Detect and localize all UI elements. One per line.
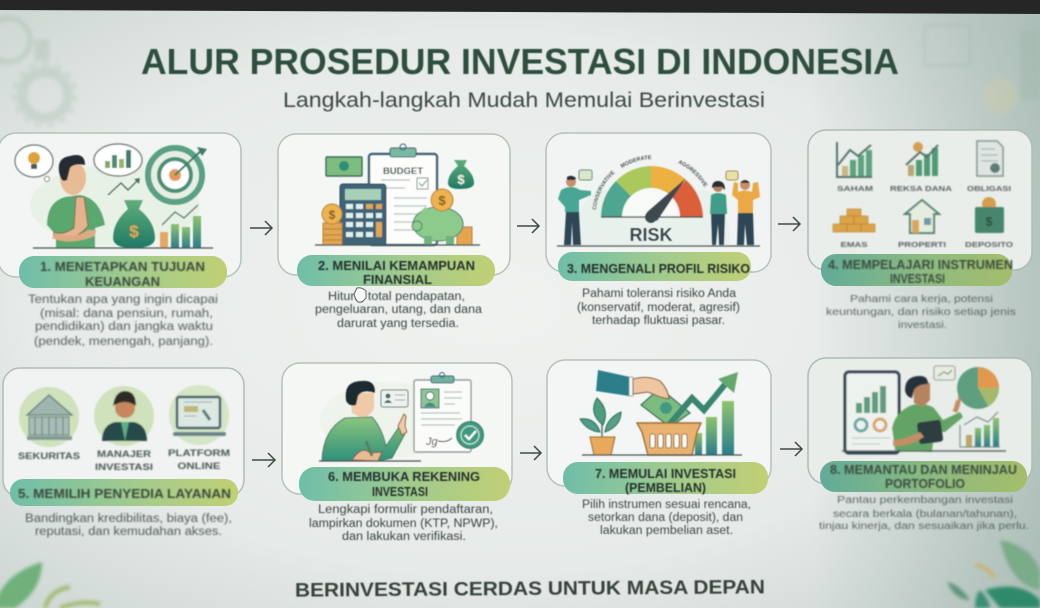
card frame	[0, 133, 241, 277]
illustration: risk gauge with people	[556, 154, 761, 248]
heading text: (PEMBELIAN)	[625, 480, 706, 495]
title: ALUR PROSEDUR INVESTASI DI INDONESIA	[141, 41, 899, 82]
panel: step 2	[278, 134, 510, 330]
description: Pahami cara kerja, potensi	[850, 293, 993, 305]
illustration: instrument icons: SAHAM	[837, 184, 873, 193]
pill heading	[563, 462, 768, 494]
illustration: service providers	[18, 385, 230, 472]
pill heading	[558, 252, 751, 281]
footer tagline: BERINVESTASI CERDAS UNTUK MASA DEPAN	[295, 576, 765, 602]
description: pengeluaran, utang, dan dana	[315, 304, 483, 316]
panel: step 6	[282, 363, 512, 543]
heading text	[830, 463, 1017, 491]
illustration: instrument icons: $	[985, 214, 993, 229]
arrow 6 to 7	[520, 446, 541, 460]
pill heading	[820, 461, 1027, 492]
pill heading	[821, 254, 1012, 286]
illustration: person thinking about goals: $	[129, 222, 139, 241]
description: lakukan pembelian aset.	[600, 525, 733, 537]
description: lampirkan dokumen (KTP, NPWP),	[309, 518, 498, 530]
illustration: investing money into basket	[580, 370, 742, 455]
illustration: service providers: SEKURITAS	[18, 451, 80, 461]
description: darurat yang tersedia.	[337, 318, 459, 330]
description	[309, 504, 498, 543]
description: investasi.	[898, 319, 947, 331]
card frame	[3, 368, 244, 497]
illustration: instrument icons: REKSA DANA	[890, 184, 953, 193]
pill heading	[299, 467, 510, 501]
description	[826, 293, 1016, 331]
card frame	[278, 134, 510, 275]
illustration: instrument icons	[833, 141, 1013, 249]
decoration: leaves bottom right	[947, 540, 1040, 608]
description: (pendek, menengah, panjang).	[34, 336, 213, 348]
illustration: person filling in registration form	[319, 372, 484, 461]
heading text: 2. MENILAI KEMAMPUAN	[318, 258, 475, 273]
illustration: budget, calculator, piggy bank: $	[329, 208, 336, 222]
faint background decoration: gears and charts	[0, 18, 1040, 126]
heading text: PORTOFOLIO	[885, 477, 965, 491]
illustration: service providers: ONLINE	[178, 461, 220, 471]
description: Bandingkan kredibilitas, biaya (fee),	[25, 513, 232, 525]
description	[582, 499, 751, 537]
illustration: risk gauge with people: CONSERVATIVE	[592, 170, 616, 210]
icon: hand cursor	[354, 288, 366, 302]
illustration: risk gauge with people: RISK	[629, 225, 673, 245]
card frame	[282, 363, 512, 494]
description: (konservatif, moderat, agresif)	[577, 302, 740, 314]
heading text	[828, 257, 1013, 286]
card frame	[547, 360, 771, 486]
description: terhadap fluktuasi pasar.	[592, 315, 725, 327]
description: secara berkala (bulanan/tahunan),	[833, 509, 1017, 520]
illustration: service providers: MANAJER	[97, 449, 152, 459]
illustration: budget, calculator, piggy bank: BUDGET	[383, 166, 423, 177]
description: setorkan dana (deposit), dan	[588, 512, 743, 524]
illustration: instrument icons: DEPOSITO	[965, 240, 1013, 249]
description: Pahami toleransi risiko Anda	[582, 288, 737, 300]
description: Pilih instrumen sesuai rencana,	[582, 499, 751, 511]
description: (misal: dana pensiun, rumah,	[40, 308, 213, 320]
top dark screen edge	[0, 0, 1040, 14]
panel: step 3	[545, 132, 772, 328]
description: Lengkapi formulir pendaftaran,	[318, 504, 493, 516]
illustration: budget, calculator, piggy bank: $	[438, 193, 446, 208]
subtitle: Langkah-langkah Mudah Memulai Berinvestasi	[283, 89, 765, 112]
arrow 3 to 4	[778, 217, 800, 231]
illustration: risk gauge with people: MODERATE	[620, 154, 652, 168]
illustration: instrument icons: OBLIGASI	[967, 184, 1011, 193]
illustration: service providers: PLATFORM	[168, 448, 230, 458]
panel: step 4	[808, 130, 1032, 331]
heading text: INVESTASI	[372, 484, 428, 499]
description: reputasi, dan kemudahan akses.	[35, 526, 222, 538]
description	[25, 513, 232, 538]
arrow 5 to 6	[252, 453, 275, 467]
description	[577, 288, 740, 327]
illustration: service providers: INVESTASI	[95, 462, 153, 472]
illustration: budget, calculator, piggy bank: $	[457, 172, 465, 187]
heading text: KEUANGAN	[85, 274, 160, 289]
heading text: 4. MEMPELAJARI INSTRUMEN	[828, 257, 1013, 272]
description: dan lakukan verifikasi.	[342, 531, 466, 543]
card frame	[808, 130, 1032, 270]
pill heading	[19, 256, 227, 288]
description: keuntungan, dan risiko setiap jenis	[826, 306, 1016, 318]
heading text: FINANSIAL	[363, 272, 432, 287]
decoration: leaves bottom left	[0, 562, 100, 608]
pill heading	[10, 479, 238, 506]
panel: step 8	[808, 358, 1032, 532]
illustration: monitoring portfolio	[842, 366, 1006, 453]
heading text: 8. MEMANTAU DAN MENINJAU	[830, 463, 1017, 477]
illustration: risk gauge with people: AGGRESSIVE	[678, 160, 708, 188]
arrow 1 to 2	[250, 221, 272, 235]
description: tinjau kinerja, dan sesuaikan jika perlu.	[819, 521, 1029, 532]
panel: step 5	[3, 368, 244, 538]
heading text: 5. MEMILIH PENYEDIA LAYANAN	[18, 486, 231, 501]
panel: step 1	[0, 133, 241, 348]
heading text: 6. MEMBUKA REKENING	[328, 469, 480, 484]
heading text: INVESTASI	[890, 271, 945, 286]
pill heading	[297, 255, 495, 286]
card frame	[546, 133, 771, 272]
description	[28, 294, 218, 348]
description: pendidikan) dan jangka waktu	[35, 321, 213, 333]
heading text	[318, 258, 475, 287]
heading text: 3. MENGENALI PROFIL RISIKO	[567, 261, 750, 276]
description: Tentukan apa yang ingin dicapai	[28, 294, 218, 306]
illustration: person thinking about goals	[15, 144, 213, 248]
illustration: instrument icons: PROPERTI	[898, 240, 946, 249]
heading text: 7. MEMULAI INVESTASI	[595, 466, 736, 481]
panel: step 7	[547, 360, 771, 537]
description: Pantau perkembangan investasi	[837, 495, 1013, 506]
description	[819, 495, 1029, 532]
illustration: instrument icons: EMAS	[840, 240, 868, 249]
description: Hitung total pendapatan,	[328, 291, 465, 303]
arrow 2 to 3	[517, 219, 539, 233]
illustration: budget, calculator, piggy bank	[315, 144, 480, 245]
heading text	[328, 469, 480, 499]
heading text: 1. MENETAPKAN TUJUAN	[40, 259, 205, 274]
arrow 7 to 8	[780, 442, 802, 456]
illustration: person filling in registration form: Jg	[425, 436, 438, 448]
description	[315, 291, 483, 330]
card frame	[808, 358, 1032, 484]
heading text	[595, 466, 736, 495]
heading text	[40, 259, 205, 289]
